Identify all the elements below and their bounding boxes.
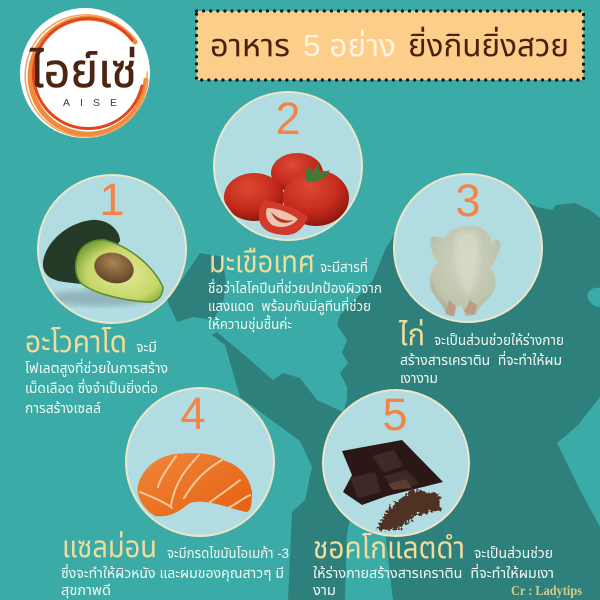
- salmon heading: แซลม่อน: [62, 531, 157, 564]
- chicken body text: จะเป็นส่วนช่วยให้ร่างกาย: [434, 332, 564, 348]
- salmon body text: ซึ่งจะทำให้ผิวหนัง และผมของคุณสาวๆ มี: [61, 563, 284, 582]
- chocolate body text: จะเป็นส่วนช่วย: [474, 545, 553, 561]
- credit: Cr : Ladytips: [511, 584, 582, 599]
- avocado heading: อะโวคาโด: [25, 326, 127, 359]
- chocolate body text: ให้ร่างกายสร้างสารเคราติน ที่จะทำให้ผมเงา: [313, 563, 554, 581]
- icon: raw chicken: [430, 226, 500, 316]
- number 4: 4: [180, 388, 206, 439]
- title banner: [196, 11, 584, 80]
- chocolate heading: ชอคโกแลตดำ: [313, 532, 465, 565]
- logo wordmark: ไอย์เซ่: [29, 44, 137, 97]
- icon: salmon: [137, 453, 252, 516]
- chocolate body text: [313, 545, 554, 598]
- salmon body text: [61, 545, 289, 599]
- salmon body text: จะมีกรดไขมันโอเมก้า -3: [167, 545, 289, 561]
- chicken body text: เงางาม: [400, 370, 438, 386]
- icon: tomatoes: [224, 153, 349, 235]
- avocado body text: จะมี: [136, 339, 157, 355]
- panel 3: chicken: [394, 174, 564, 386]
- logo ring: [25, 15, 147, 137]
- avocado body text: โฟเลตสูงที่ช่วยในการสร้าง: [25, 358, 168, 377]
- icon: chocolate: [342, 440, 443, 530]
- chicken body text: [400, 332, 564, 386]
- avocado body text: การสร้างเซลล์: [25, 400, 101, 416]
- tomato body text: จะมีสารที่: [320, 257, 368, 275]
- panel 1: avocado: [25, 174, 186, 416]
- avocado body text: เม็ดเลือด ซึ่งจำเป็นยิ่งต่อ: [25, 378, 158, 396]
- number 3: 3: [455, 175, 481, 226]
- icon: avocado: [43, 220, 163, 306]
- logo: [20, 8, 150, 138]
- panel 2: tomato: [208, 92, 382, 333]
- title text: five: 5 อย่าง: [303, 28, 396, 63]
- number 1: 1: [99, 174, 125, 225]
- number 2: 2: [275, 93, 301, 144]
- tomato body text: [208, 257, 382, 333]
- tomato body text: ให้ความชุ่มชื้นค่ะ: [208, 314, 292, 333]
- logo subtitle: AISE: [63, 97, 117, 109]
- silhouette of woman: [167, 190, 600, 600]
- avocado body text: [25, 339, 168, 416]
- salmon body text: สุขภาพดี: [61, 582, 111, 599]
- title text: slogan: ยิ่งกินยิ่งสวย: [408, 26, 569, 63]
- tomato body text: แสงแดด พร้อมกับมีลูทีนที่ช่วย: [208, 296, 371, 315]
- chocolate body text: งาม: [313, 582, 336, 598]
- number 5: 5: [382, 389, 408, 440]
- chicken body text: สร้างสารเคราติน ที่จะทำให้ผม: [400, 350, 562, 368]
- title text: food: อาหาร: [210, 28, 290, 63]
- panel 5: dark chocolate: [313, 389, 554, 598]
- tomato heading: มะเขือเทศ: [209, 246, 315, 279]
- tomato body text: ชื่อว่าไลโคปีนที่ช่วยปกป้องผิวจาก: [208, 278, 382, 296]
- chicken heading: ไก่: [398, 319, 425, 352]
- panel 4: salmon: [61, 388, 289, 599]
